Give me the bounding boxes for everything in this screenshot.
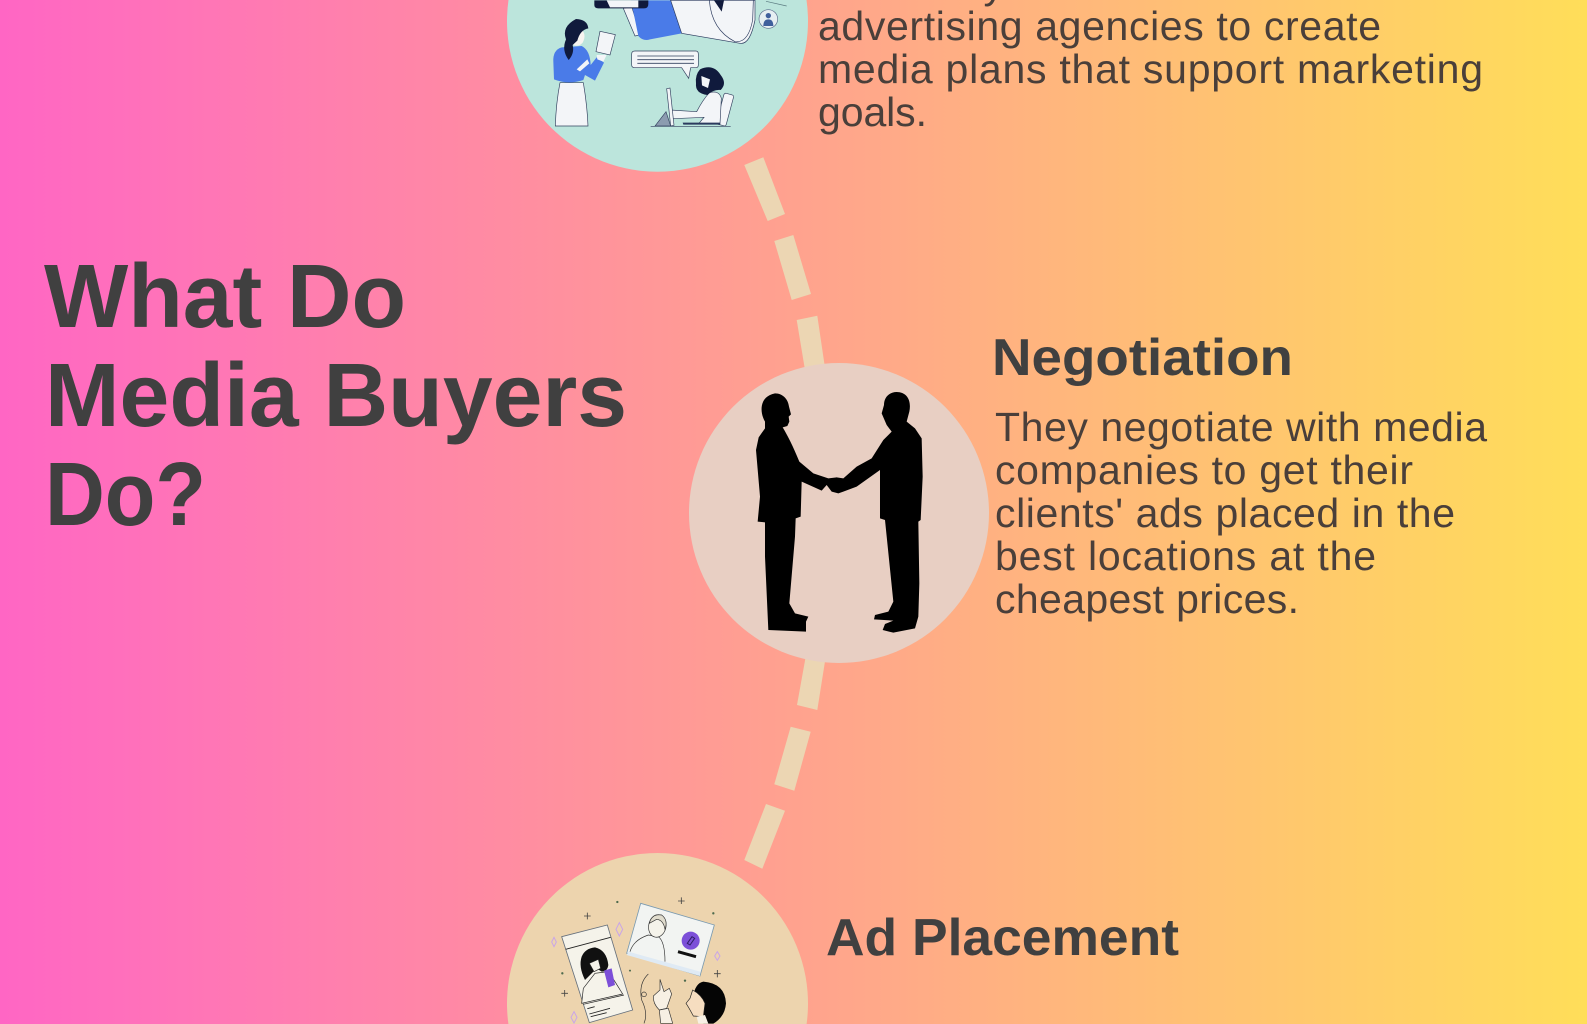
dashed connector: middle circle to bottom circle — [744, 655, 826, 869]
text block: media planning: goals. — [818, 89, 927, 135]
text block: negotiation — [995, 404, 1487, 622]
text block: media planning: advertising agencies to create — [818, 3, 1381, 49]
speech bubble — [632, 51, 698, 78]
title: Do? — [45, 445, 206, 545]
heading: ad placement: Ad Placement — [826, 909, 1179, 967]
title: Media Buyers — [45, 346, 627, 446]
dashed connector: top circle to middle circle — [744, 157, 825, 370]
text block: negotiation: They negotiate with media — [995, 404, 1487, 450]
heading: negotiation: Negotiation — [992, 329, 1293, 387]
text block: negotiation: best locations at the — [995, 533, 1376, 579]
title — [44, 247, 627, 545]
icon: two silhouettes shaking hands in circle — [689, 363, 989, 663]
text block: negotiation: companies to get their — [995, 447, 1413, 493]
text block: negotiation: cheapest prices. — [995, 576, 1299, 622]
icon: media planning illustration in teal circle — [507, 0, 808, 172]
ad card with woman — [562, 925, 633, 1023]
ad card with man and purple badge — [627, 903, 714, 976]
pointing hand and woman — [641, 974, 726, 1024]
icon: social media ads illustration in tan circle — [507, 853, 808, 1024]
sparkles — [552, 923, 720, 1023]
text block: media planning: media plans that support marketing — [818, 46, 1483, 92]
title: What Do — [44, 247, 406, 347]
megaphone — [594, 0, 755, 43]
standing woman with document — [553, 19, 615, 126]
seated woman with laptop — [651, 67, 734, 126]
text block: negotiation: clients' ads placed in the — [995, 490, 1455, 536]
text block: media planning — [818, 0, 1483, 135]
